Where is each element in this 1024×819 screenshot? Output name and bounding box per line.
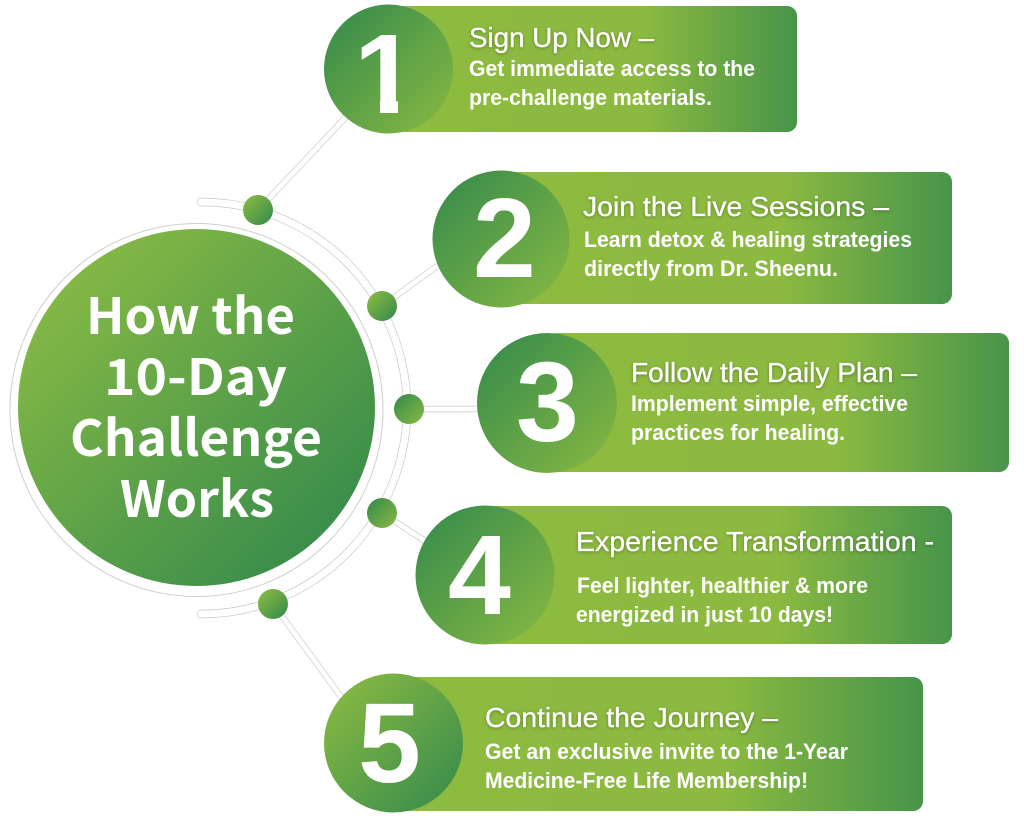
- step 3: Follow the Daily Plan –: [631, 357, 917, 388]
- step 1: Get immediate access to the: [469, 56, 755, 81]
- central circle with title: How the: [86, 277, 295, 349]
- step 2: [432, 170, 952, 308]
- step 5: Medicine-Free Life Membership!: [485, 768, 808, 793]
- central circle with title: Challenge: [70, 399, 322, 471]
- step 5: 5: [358, 680, 421, 806]
- step 2: 2: [473, 175, 536, 301]
- step 1: 1: [354, 11, 417, 137]
- central circle with title: Works: [120, 460, 274, 532]
- connector lines: [258, 117, 480, 698]
- node 1: [243, 195, 273, 225]
- step 4: Experience Transformation -: [576, 526, 934, 557]
- step 4: [416, 506, 952, 644]
- step 1: pre-challenge materials.: [469, 85, 712, 110]
- ring around central circle: [10, 224, 383, 596]
- step 2: Join the Live Sessions –: [583, 191, 889, 222]
- node 3: [394, 394, 424, 424]
- step 5: Get an exclusive invite to the 1-Year: [485, 739, 848, 764]
- central circle with title: 10-Day: [104, 338, 287, 410]
- node 5: [258, 589, 288, 619]
- step 1: Sign Up Now –: [469, 22, 654, 53]
- node 4: [367, 498, 397, 528]
- step 3: 3: [516, 338, 579, 464]
- step 2: directly from Dr. Sheenu.: [584, 256, 838, 281]
- step 3: [477, 333, 1009, 473]
- step 4: 4: [448, 512, 511, 638]
- step 2: Learn detox & healing strategies: [584, 227, 912, 252]
- step 3: Implement simple, effective: [631, 391, 908, 416]
- step 4: energized in just 10 days!: [576, 602, 833, 627]
- step 5: Continue the Journey –: [485, 702, 778, 733]
- central circle with title: [18, 229, 375, 586]
- outer arc band: [201, 202, 407, 614]
- step 4: Feel lighter, healthier & more: [577, 573, 868, 598]
- step 5: [324, 674, 923, 812]
- step 1: [324, 4, 797, 137]
- node 2: [367, 291, 397, 321]
- step 3: practices for healing.: [631, 420, 845, 445]
